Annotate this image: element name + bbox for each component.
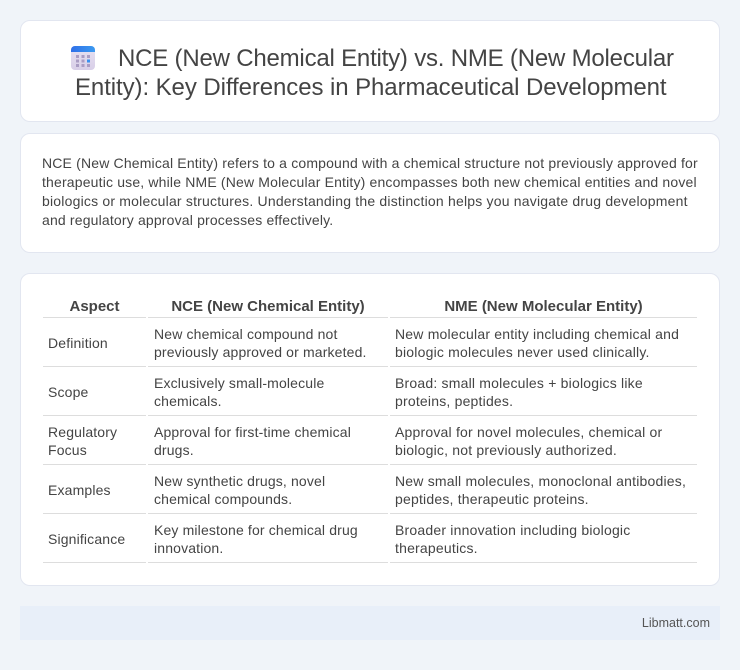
panel: introduction text: and regulatory approval processes effectively. [42,212,333,228]
row: Regulatory Focus: Approval for novel molecules, chemical or [395,424,662,440]
row: Examples: Examples [48,482,111,498]
row: Significance [48,522,630,556]
row: Regulatory Focus: biologic, not previously authorized. [395,442,617,458]
table header: NME (New Molecular Entity) [444,298,643,315]
row: Scope: Scope [48,384,88,400]
row: Significance: Broader innovation including biologic [395,522,630,538]
title: Entity): Key Differences in Pharmaceutical Development [75,74,667,101]
table header: NCE (New Chemical Entity) [171,298,365,315]
footer text: Libmatt.com [642,616,710,630]
row: Significance: therapeutics. [395,540,478,556]
title [75,45,674,101]
title: NCE (New Chemical Entity) vs. NME (New Molecular [118,45,674,72]
table header [69,298,643,315]
panel: introduction text [20,133,720,253]
row: Scope: chemicals. [154,393,222,409]
row: Definition: New molecular entity including chemical and [395,326,679,342]
row: Definition [48,326,679,360]
row: Examples [48,473,686,507]
row: Definition: Definition [48,335,108,351]
row: Scope: Broad: small molecules + biologics like [395,375,643,391]
panel: introduction text: NCE (New Chemical Entity) refers to a compound with a chemical structure not previously approved for [42,155,698,171]
row: Regulatory Focus: Focus [48,442,87,458]
panel: title card [20,20,720,122]
row: Definition: New chemical compound not [154,326,338,342]
row: Definition: biologic molecules never used clinically. [395,344,650,360]
row: Regulatory Focus [48,424,662,458]
row: Examples: chemical compounds. [154,491,292,507]
row: Examples: New synthetic drugs, novel [154,473,325,489]
panel: comparison table [20,273,720,586]
row: Significance: Significance [48,531,125,547]
row: Significance: innovation. [154,540,223,556]
panel: introduction text: therapeutic use, while NME (New Molecular Entity) encompasses both new chemical entities and novel [42,174,697,190]
row: Regulatory Focus: Approval for first-time chemical [154,424,351,440]
row: Examples: New small molecules, monoclonal antibodies, [395,473,686,489]
row: Examples: peptides, therapeutic proteins. [395,491,589,507]
row: Regulatory Focus: Regulatory [48,424,117,440]
row: Significance: Key milestone for chemical drug [154,522,358,538]
row: Scope: Exclusively small-molecule [154,375,324,391]
icon: calendar [71,46,95,70]
footer bar [20,606,720,640]
row: Scope [48,375,643,409]
row: Scope: proteins, peptides. [395,393,513,409]
panel: introduction text: biologics or molecular structures. Understanding the distinction helps you navigate drug development [42,193,688,209]
row: Regulatory Focus: drugs. [154,442,194,458]
row: Definition: previously approved or marketed. [154,344,367,360]
table header: Aspect [69,298,120,315]
